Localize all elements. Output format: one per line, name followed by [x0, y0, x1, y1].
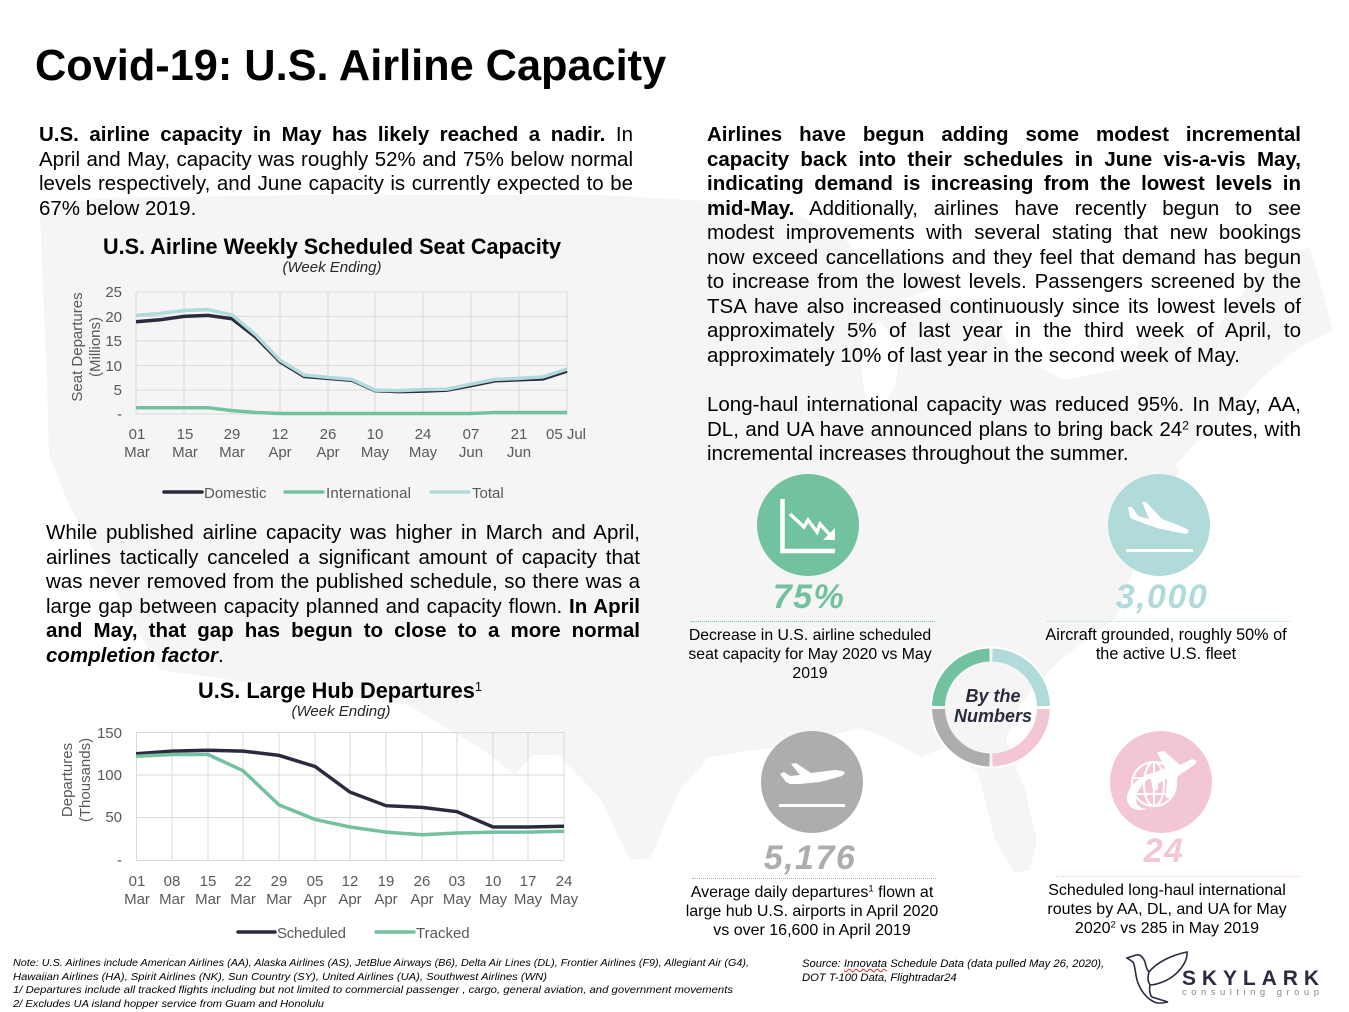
legend [164, 485, 504, 502]
x axis labels: Apr [410, 891, 434, 908]
icon: landing plane in blue circle [1108, 474, 1210, 576]
y axis labels [97, 725, 122, 869]
x axis labels: 22 [235, 873, 251, 890]
legend [238, 925, 470, 942]
text block: published capacity vs flown: large gap between capacity planned and capacity flown. In April [46, 595, 640, 618]
x axis labels: 01 [129, 873, 145, 890]
x axis labels: 05 Jul [546, 426, 586, 443]
caption: 5,176: Average daily departures1 flown at [691, 884, 933, 901]
x axis labels [124, 426, 586, 461]
icon: declining chart in green circle [757, 474, 859, 576]
stat: 75%: 75% [773, 578, 845, 616]
x axis labels: 07 [463, 426, 479, 443]
caption: 24 [1047, 882, 1287, 937]
x axis labels: May [361, 444, 390, 461]
x axis labels: Jun [459, 444, 483, 461]
x axis labels: 03 [449, 873, 465, 890]
chart subtitle: (Week Ending) [292, 703, 390, 720]
divider: green [691, 621, 935, 622]
divider: blue [1047, 621, 1290, 622]
y axis labels: - [117, 406, 122, 423]
y axis labels: - [117, 852, 122, 869]
text block: modest incremental capacity: approximately 10% of last year in the second week of May. [707, 344, 1240, 367]
legend: Total [472, 485, 504, 502]
x axis labels: 24 [556, 873, 572, 890]
x axis labels: 08 [164, 873, 180, 890]
text block: long-haul international [707, 393, 1301, 465]
y axis labels: 25 [105, 284, 122, 301]
x axis labels: Mar [124, 444, 150, 461]
x axis labels: Mar [159, 891, 185, 908]
caption: 5,176 [686, 884, 938, 939]
logo: Skylark Consulting Group: SKYLARK [1182, 967, 1319, 990]
footnotes: 2/ Excludes UA island hopper service from Guam and Honolulu [12, 998, 324, 1010]
y axis title: (Millions) [87, 317, 104, 377]
text block: modest incremental capacity: Airlines have begun adding some modest incremental [707, 123, 1301, 146]
logo: Skylark Consulting Group: consulting group [1182, 987, 1319, 998]
stat: 5,176: 5,176 [764, 839, 856, 877]
x axis labels: Apr [268, 444, 292, 461]
x axis labels: 01 [129, 426, 145, 443]
x axis labels: May [514, 891, 543, 908]
x axis labels: Mar [266, 891, 292, 908]
y axis title: Departures [59, 743, 76, 817]
text block: long-haul international: Long-haul international capacity was reduced 95%. In May, AA, [707, 393, 1301, 416]
x axis labels: Mar [219, 444, 245, 461]
caption: 75%: Decrease in U.S. airline scheduled [689, 627, 931, 644]
caption: 5,176: vs over 16,600 in April 2019 [713, 922, 911, 939]
title: Covid-19: U.S. Airline Capacity [35, 42, 666, 90]
legend: Scheduled [277, 925, 346, 942]
x axis labels: May [409, 444, 438, 461]
text block: published capacity vs flown: was never removed from the published schedule, so there was a [46, 570, 640, 593]
x axis labels: May [443, 891, 472, 908]
line: international [136, 408, 567, 414]
centre ring: by the numbers: Numbers [954, 706, 1032, 726]
text block: modest incremental capacity: modest improvements with several stating that new bookings [707, 221, 1301, 244]
text block: published capacity vs flown: completion factor. [46, 644, 224, 667]
x axis labels: 21 [511, 426, 527, 443]
text block: published capacity vs flown: While published airline capacity was higher in March and April, [46, 521, 640, 544]
footnotes: Note: U.S. Airlines include American Airlines (AA), Alaska Airlines (AS), JetBlue Airways (B6), Delta Air Lines (DL), Frontier Airlines (F9), Allegiant Air (G4), [13, 957, 749, 969]
x axis labels: 29 [271, 873, 287, 890]
caption: 3,000: the active U.S. fleet [1096, 645, 1236, 663]
text block: published capacity vs flown: airlines tactically canceled a significant amount of capacity that [46, 546, 640, 569]
x axis labels: May [550, 891, 579, 908]
x axis labels: Apr [316, 444, 340, 461]
x axis labels: 12 [272, 426, 288, 443]
text block: modest incremental capacity: capacity back into their schedules in June vis-a-vis May, [707, 148, 1301, 171]
text block: capacity nadir [39, 123, 633, 220]
caption: 24: 20202 vs 285 in May 2019 [1075, 920, 1259, 937]
source note [802, 958, 1104, 984]
chart: large hub departures [59, 678, 579, 942]
chart title: U.S. Large Hub Departures [198, 678, 478, 703]
x axis labels: Mar [230, 891, 256, 908]
text block: published capacity vs flown: and May, that gap has begun to close to a more normal [46, 619, 640, 642]
line: scheduled [136, 750, 564, 827]
footnotes [12, 957, 749, 1010]
caption: 75%: 2019 [792, 665, 828, 682]
stat: 24: 24 [1144, 832, 1184, 870]
legend: Tracked [416, 925, 470, 942]
y axis labels: 10 [105, 358, 122, 375]
source note: DOT T-100 Data, Flightradar24 [802, 972, 957, 984]
caption: 5,176: large hub U.S. airports in April 2020 [686, 903, 938, 920]
footnotes: 1/ Departures include all tracked flights including but not limited to commercial passenger , cargo, general aviation, and government movements [13, 984, 734, 996]
text block: long-haul international: DL, and UA have announced plans to bring back 242 routes, with [707, 418, 1301, 441]
x axis labels: 17 [520, 873, 536, 890]
x axis labels: Apr [303, 891, 327, 908]
x axis labels [124, 873, 579, 908]
x axis labels: 24 [415, 426, 431, 443]
x axis labels: May [479, 891, 508, 908]
legend: International [326, 485, 411, 502]
caption: 75% [688, 627, 932, 682]
text block: modest incremental capacity: approximately 5% of last year in the third week of April, to [707, 319, 1301, 342]
line: tracked [136, 754, 564, 835]
y axis labels: 150 [97, 725, 122, 742]
legend: Domestic [204, 485, 267, 502]
y axis title [69, 292, 104, 402]
line: domestic [136, 315, 567, 392]
text block: capacity nadir: U.S. airline capacity in May has likely reached a nadir. In [39, 123, 633, 146]
caption: 24: Scheduled long-haul international [1048, 882, 1286, 899]
y axis title: Seat Departures [69, 292, 86, 402]
text block: modest incremental capacity: mid-May. Additionally, airlines have recently begun to see [707, 197, 1301, 220]
y axis labels: 15 [105, 333, 122, 350]
x axis labels: 05 [307, 873, 323, 890]
logo: Skylark Consulting Group [1125, 951, 1319, 1004]
caption: 3,000: Aircraft grounded, roughly 50% of [1045, 626, 1287, 644]
x axis labels: 26 [320, 426, 336, 443]
stat: 3,000: 3,000 [1116, 578, 1208, 616]
text block: modest incremental capacity [707, 123, 1301, 367]
divider: grey [692, 878, 936, 879]
text block: modest incremental capacity: now exceed cancellations and they feel that demand has begun [707, 246, 1301, 269]
divider: pink [1056, 876, 1300, 877]
y axis labels [105, 284, 122, 423]
caption: 24: routes by AA, DL, and UA for May [1047, 901, 1287, 918]
x axis labels: Mar [195, 891, 221, 908]
x axis labels: Mar [124, 891, 150, 908]
x axis labels: Apr [338, 891, 362, 908]
chart: weekly scheduled seat capacity [69, 234, 586, 502]
caption: 75%: seat capacity for May 2020 vs May [688, 646, 932, 663]
y axis labels: 100 [97, 767, 122, 784]
footnotes: Hawaiian Airlines (HA), Spirit Airlines (NK), Sun Country (SY), United Airlines (UA), Southwest Airlines (WN) [13, 971, 547, 983]
x axis labels: 10 [367, 426, 383, 443]
text block: capacity nadir: levels respectively, and June capacity is currently expected to be [39, 172, 633, 195]
y axis title [59, 738, 94, 822]
text block: capacity nadir: April and May, capacity was roughly 52% and 75% below normal [39, 148, 633, 171]
x axis labels: Jun [507, 444, 531, 461]
x axis labels: 10 [485, 873, 501, 890]
y axis labels: 5 [114, 382, 122, 399]
source note: Source: Innovata Schedule Data (data pulled May 26, 2020), [802, 958, 1104, 970]
text block: capacity nadir: 67% below 2019. [39, 197, 196, 220]
x axis labels: 29 [224, 426, 240, 443]
x axis labels: 26 [414, 873, 430, 890]
icon: departing plane in grey circle [761, 731, 863, 833]
text block: modest incremental capacity: to increase from the lowest levels. Passengers screened by the [707, 270, 1301, 293]
chart title: U.S. Airline Weekly Scheduled Seat Capacity [103, 234, 562, 259]
icon: globe and plane in pink circle [1110, 731, 1212, 833]
x axis labels: 12 [342, 873, 358, 890]
y axis title: (Thousands) [77, 738, 94, 822]
line: total [136, 310, 567, 391]
caption: 3,000 [1045, 626, 1287, 663]
x axis labels: 15 [200, 873, 216, 890]
x axis labels: 15 [177, 426, 193, 443]
text block: published capacity vs flown [46, 521, 640, 667]
chart title: 1 [475, 679, 482, 694]
text block: modest incremental capacity: TSA have also increased continuously since its lowest levels of [707, 295, 1301, 318]
x axis labels: 19 [378, 873, 394, 890]
centre ring: by the numbers [930, 646, 1050, 768]
y axis labels: 20 [105, 309, 122, 326]
background map of the United States [40, 195, 1333, 873]
text block: long-haul international: incremental increases throughout the summer. [707, 442, 1129, 465]
y axis labels: 50 [105, 809, 122, 826]
x axis labels: Mar [172, 444, 198, 461]
chart subtitle: (Week Ending) [283, 259, 381, 276]
x axis labels: Apr [374, 891, 398, 908]
centre ring: by the numbers: By the [965, 686, 1021, 706]
text block: modest incremental capacity: indicating demand is increasing from the lowest levels in [707, 172, 1301, 195]
